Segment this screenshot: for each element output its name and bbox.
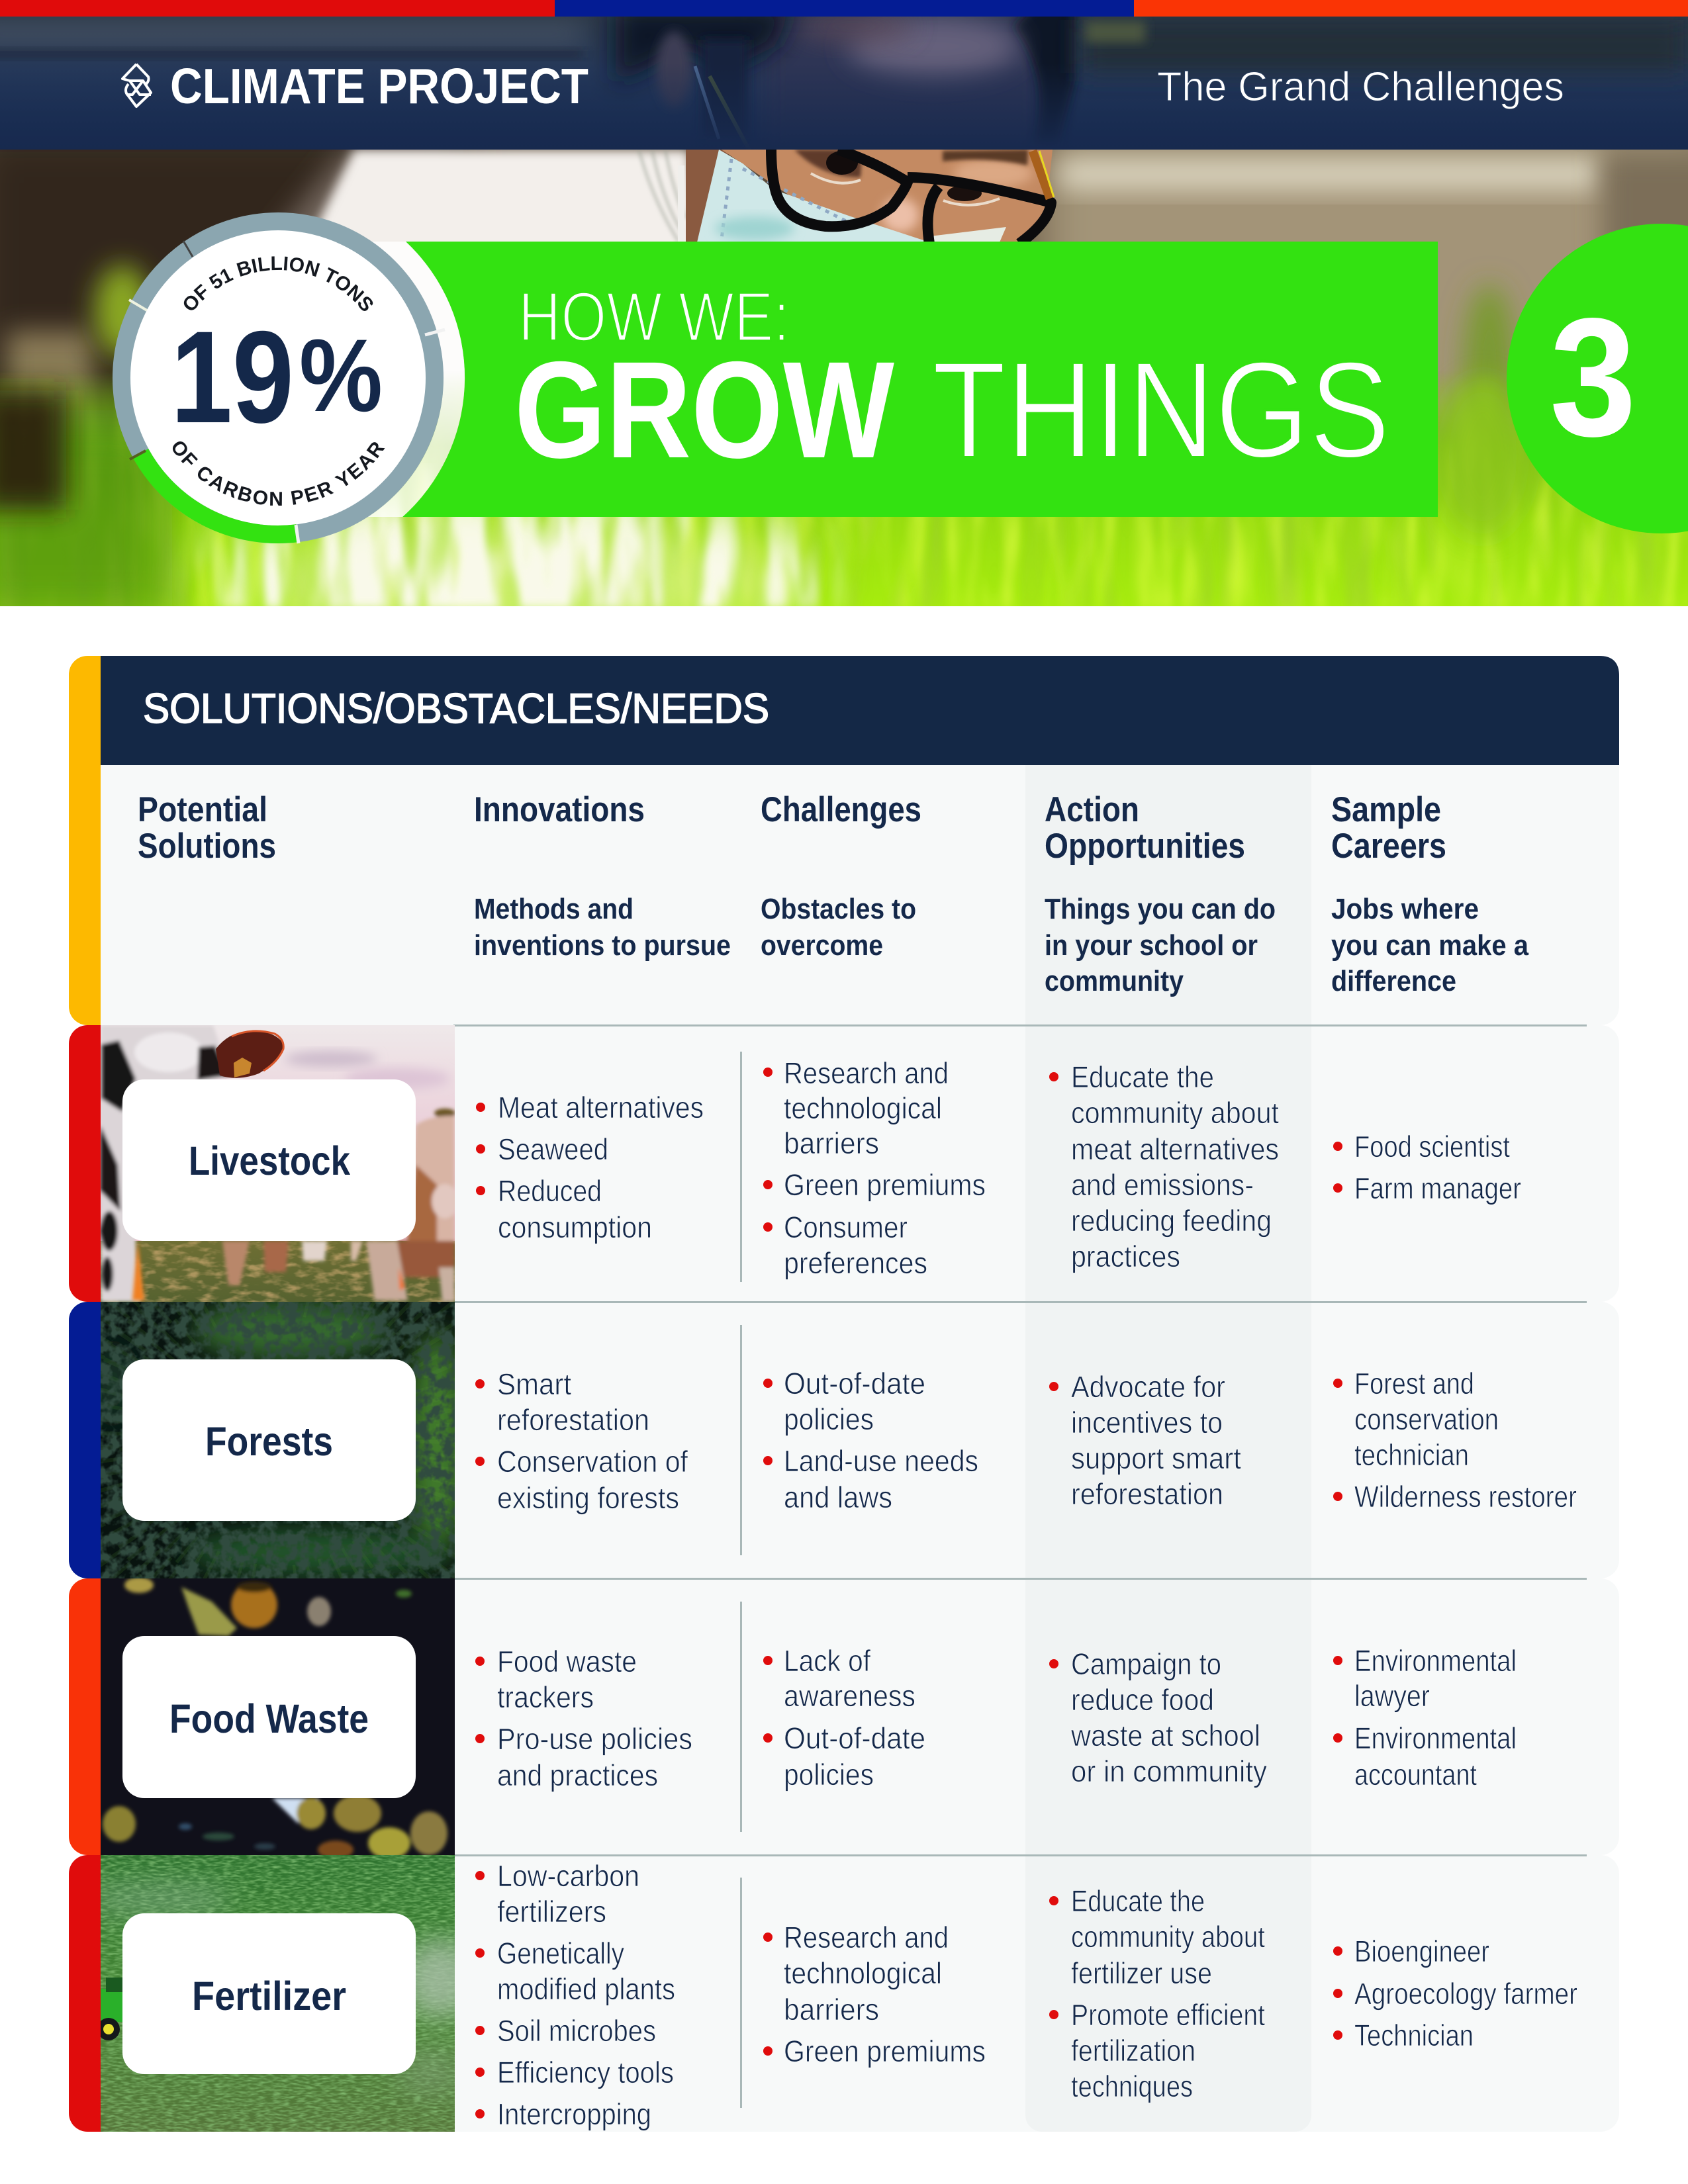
food waste careers: accountant (1354, 1758, 1477, 1792)
forests challenges: Land-use needs (784, 1444, 978, 1478)
column header: challenges (761, 790, 921, 962)
photo: food waste on dark ground (101, 1577, 455, 1859)
livestock action opportunities: and emissions- (1071, 1168, 1254, 1202)
photo: tractor spraying a field (86, 1855, 477, 2132)
column header: sample careers: you can make a (1331, 929, 1528, 962)
livestock action opportunities: meat alternatives (1071, 1132, 1279, 1166)
food waste action opportunities (1049, 1647, 1267, 1788)
icon: logo mark (122, 64, 151, 107)
livestock challenges: Green premiums (784, 1168, 986, 1202)
table heading: SOLUTIONS/OBSTACLES/NEEDS (143, 686, 769, 732)
food waste action opportunities: reduce food (1071, 1683, 1214, 1717)
livestock challenges: Research and (784, 1056, 949, 1090)
forests challenges: and laws (784, 1480, 892, 1514)
label: fertilizer: Fertilizer (192, 1974, 346, 2019)
title: how we: HOW WE: (518, 278, 790, 356)
label: food waste: Food Waste (169, 1696, 369, 1741)
column header: potential solutions: Solutions (138, 827, 276, 866)
title banner (402, 242, 1438, 517)
column header: innovations: Methods and (474, 893, 633, 925)
column header: sample careers: Careers (1331, 827, 1446, 866)
column header: innovations: inventions to pursue (474, 929, 731, 962)
glasses (771, 150, 1051, 244)
panel: solutions table (69, 656, 1619, 2132)
fertilizer careers: Technician (1354, 2019, 1474, 2052)
right cow (222, 1109, 458, 1302)
forests action opportunities: support smart (1071, 1441, 1241, 1475)
livestock innovations: consumption (498, 1210, 652, 1244)
fertilizer action opportunities: Promote efficient (1071, 1998, 1265, 2032)
forests innovations: Smart (497, 1367, 571, 1401)
title: grow: GROW (514, 334, 895, 487)
livestock action opportunities: reducing feeding (1071, 1204, 1272, 1238)
food waste innovations: and practices (497, 1758, 658, 1792)
livestock action opportunities: practices (1071, 1240, 1180, 1273)
livestock challenges: barriers (784, 1126, 879, 1160)
label: livestock (122, 1079, 416, 1241)
livestock innovations: Reduced (498, 1174, 602, 1208)
food waste careers (1333, 1644, 1517, 1792)
food waste challenges: policies (784, 1758, 874, 1792)
badge: grand challenge number 3: 3 (1550, 283, 1636, 472)
column header: challenges: Challenges (761, 790, 921, 829)
fertilizer challenges: Research and (784, 1921, 949, 1954)
forests innovations: Conservation of (497, 1445, 688, 1479)
label: forests: Forests (205, 1419, 333, 1464)
livestock action opportunities (1049, 1060, 1279, 1273)
forests innovations (475, 1367, 688, 1515)
food waste challenges: Out-of-date (784, 1721, 925, 1755)
hero photo: scientist among green plants (0, 150, 1688, 606)
title: things: THINGS (932, 334, 1390, 487)
livestock innovations: Seaweed (498, 1132, 608, 1166)
food waste innovations: trackers (497, 1680, 594, 1714)
forests careers (1333, 1367, 1577, 1514)
donut: 19 percent of carbon (113, 212, 465, 544)
fertilizer innovations: Low-carbon (497, 1859, 639, 1893)
food waste innovations: Food waste (497, 1645, 637, 1678)
livestock action opportunities: Educate the (1071, 1060, 1214, 1094)
livestock innovations (476, 1091, 704, 1244)
forests action opportunities: reforestation (1071, 1477, 1223, 1511)
livestock challenges: technological (784, 1091, 942, 1125)
food waste careers: Environmental (1354, 1721, 1517, 1755)
column header: sample careers: difference (1331, 965, 1456, 997)
forests challenges (763, 1367, 978, 1514)
column header: action opportunities: Action (1045, 790, 1139, 829)
fertilizer action opportunities: Educate the (1071, 1884, 1205, 1918)
column header: action opportunities: community (1045, 965, 1184, 997)
fertilizer innovations: Genetically (497, 1936, 624, 1970)
label: forests (122, 1359, 416, 1521)
column header: sample careers: Jobs where (1331, 893, 1479, 925)
fertilizer innovations: Intercropping (497, 2097, 651, 2131)
fertilizer action opportunities: community about (1071, 1920, 1265, 1954)
fertilizer careers (1333, 1934, 1577, 2052)
forests careers: conservation (1354, 1402, 1499, 1436)
forests careers: Wilderness restorer (1354, 1480, 1577, 1514)
column header: potential solutions (138, 790, 276, 866)
column header: action opportunities: Opportunities (1045, 827, 1245, 866)
food waste action opportunities: or in community (1071, 1754, 1267, 1788)
forests innovations: reforestation (497, 1403, 649, 1437)
livestock careers: Farm manager (1354, 1171, 1521, 1205)
food waste action opportunities: Campaign to (1071, 1647, 1221, 1681)
column header: innovations: Innovations (474, 790, 645, 829)
column header: challenges: overcome (761, 929, 883, 962)
column header: action opportunities: Things you can do (1045, 893, 1276, 925)
header band (0, 17, 1688, 150)
fertilizer action opportunities: techniques (1071, 2070, 1193, 2103)
photo: forest from above (101, 1302, 455, 1578)
food waste challenges (763, 1644, 925, 1792)
fertilizer challenges: technological (784, 1956, 942, 1990)
livestock challenges (763, 1056, 986, 1280)
forests action opportunities: incentives to (1071, 1406, 1223, 1439)
fertilizer action opportunities: fertilizer use (1071, 1956, 1212, 1990)
livestock careers: Food scientist (1354, 1130, 1510, 1163)
fertilizer careers: Agroecology farmer (1354, 1977, 1577, 2011)
column header: potential solutions: Potential (138, 790, 267, 829)
fertilizer challenges: barriers (784, 1993, 879, 2026)
column header: innovations (474, 790, 731, 962)
photo: cows in a field (101, 1025, 458, 1302)
livestock challenges: Consumer (784, 1210, 908, 1244)
column header: sample careers (1331, 790, 1528, 997)
label: livestock: Livestock (189, 1138, 350, 1183)
column header: sample careers: Sample (1331, 790, 1441, 829)
logo: Climate Project: CLIMATE PROJECT (170, 58, 588, 114)
fertilizer innovations: modified plants (497, 1972, 675, 2006)
label: fertilizer (122, 1913, 416, 2074)
cow ear with tag (216, 1031, 284, 1078)
top colour bar (0, 0, 1688, 17)
left cow (101, 1025, 228, 1302)
fertilizer action opportunities (1049, 1884, 1265, 2103)
livestock careers (1333, 1130, 1521, 1205)
livestock innovations: Meat alternatives (498, 1091, 704, 1124)
donut: green 19 percent segment (140, 453, 297, 534)
fertilizer challenges: Green premiums (784, 2034, 986, 2068)
column header: action opportunities (1045, 790, 1276, 997)
fertilizer careers: Bioengineer (1354, 1934, 1489, 1968)
forests innovations: existing forests (497, 1481, 679, 1515)
column header: challenges: Obstacles to (761, 893, 916, 925)
scientist face and mask (678, 150, 1054, 244)
label: food waste (122, 1636, 416, 1798)
icon: tractor (97, 1978, 123, 2040)
donut: 19 percent figure (171, 304, 383, 450)
header tagline: The Grand Challenges (1157, 64, 1564, 110)
donut: curved caption bottom: OF CARBON PER YEAR (172, 441, 385, 506)
fertilizer innovations: Soil microbes (497, 2014, 656, 2048)
donut: 19 percent figure: 19 (171, 304, 294, 450)
livestock action opportunities: community about (1071, 1096, 1279, 1130)
fertilizer innovations (475, 1859, 675, 2131)
livestock challenges: preferences (784, 1246, 927, 1280)
column header: action opportunities: in your school or (1045, 929, 1258, 962)
food waste action opportunities: waste at school (1070, 1719, 1260, 1752)
food waste careers: Environmental (1354, 1644, 1517, 1678)
forests challenges: policies (784, 1402, 874, 1436)
fertilizer innovations: Efficiency tools (497, 2056, 674, 2089)
fertilizer innovations: fertilizers (497, 1895, 606, 1929)
forests challenges: Out-of-date (784, 1367, 925, 1400)
food waste careers: lawyer (1354, 1679, 1430, 1713)
donut: 19 percent figure: % (299, 318, 383, 433)
food waste challenges: Lack of (784, 1644, 870, 1678)
forests action opportunities: Advocate for (1071, 1370, 1225, 1404)
donut: curved caption top: OF 51 BILLION TONS (184, 256, 373, 311)
food waste challenges: awareness (784, 1679, 915, 1713)
forests action opportunities (1049, 1370, 1241, 1511)
food waste innovations (475, 1645, 692, 1792)
fertilizer action opportunities: fertilization (1071, 2034, 1196, 2068)
forests careers: technician (1354, 1438, 1469, 1472)
fertilizer challenges (763, 1921, 986, 2068)
food waste innovations: Pro-use policies (497, 1722, 692, 1756)
badge: grand challenge number 3 (1507, 224, 1688, 533)
forests careers: Forest and (1354, 1367, 1474, 1400)
